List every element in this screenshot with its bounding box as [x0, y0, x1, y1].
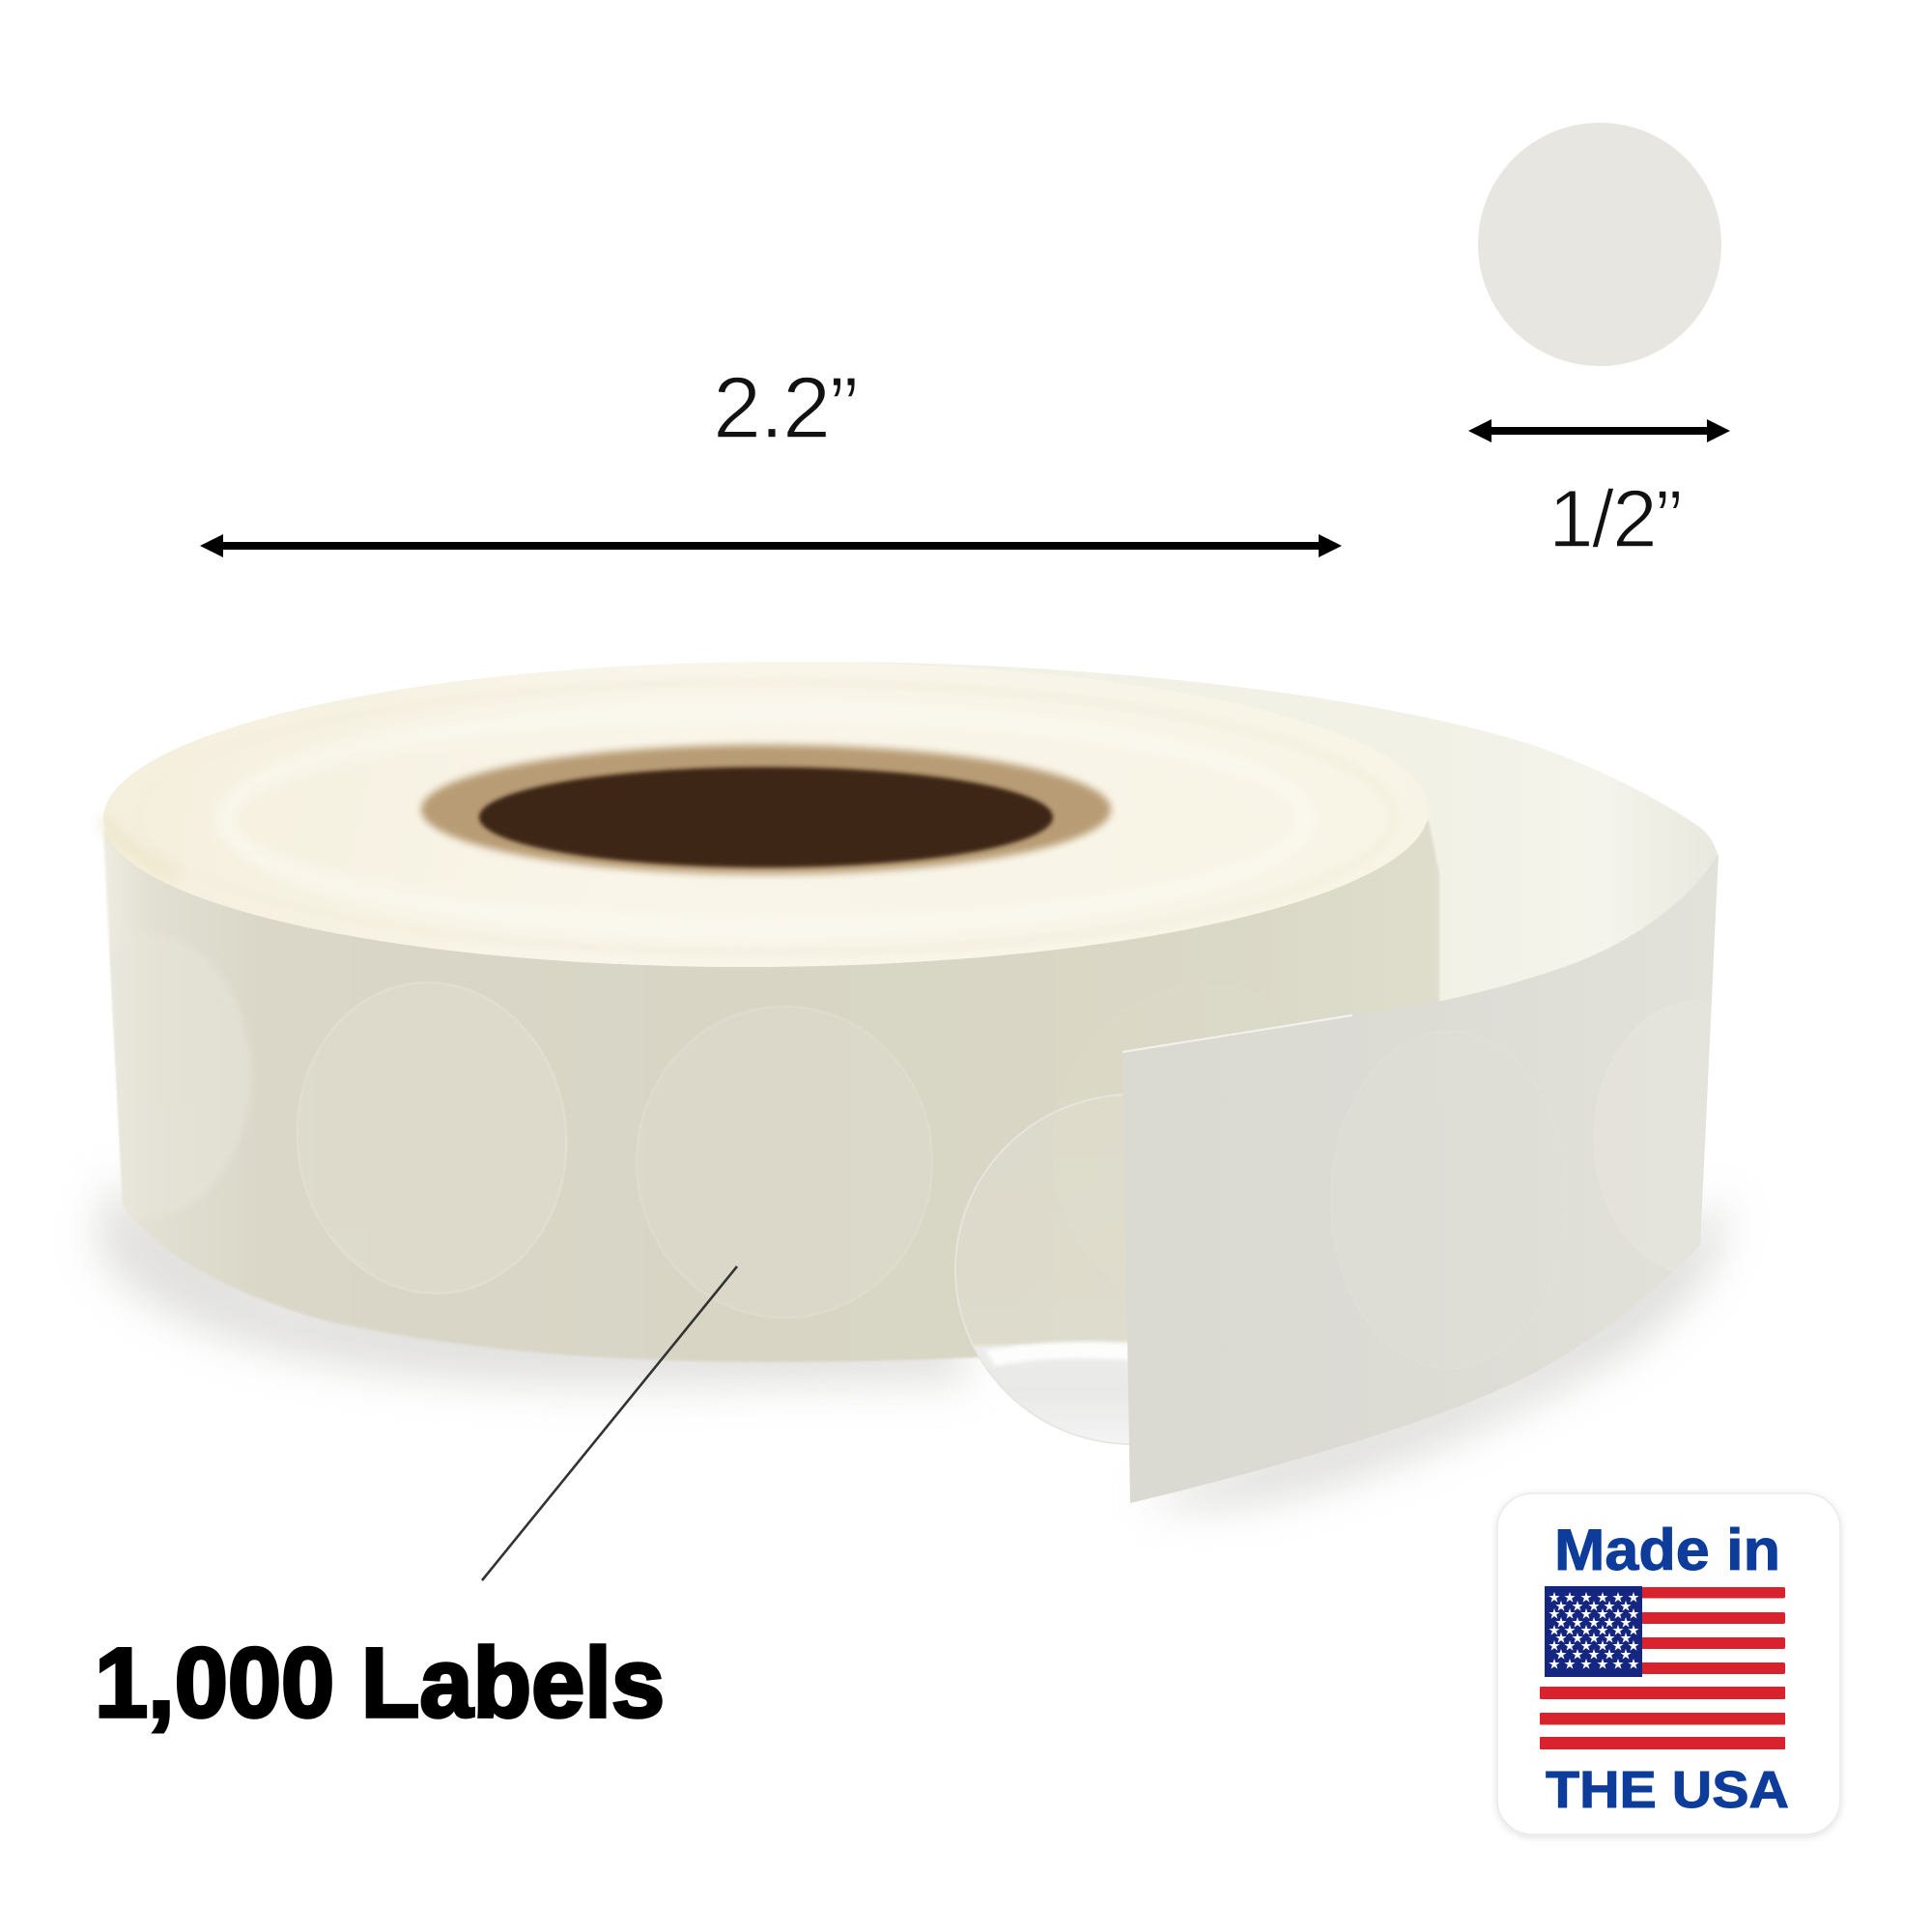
flag stars: ★★★★★ — [1555, 1615, 1633, 1631]
flag stars: ★★★★★ — [1555, 1600, 1633, 1615]
flag stars: ★★★★★★ — [1548, 1623, 1640, 1638]
badge card — [1497, 1493, 1840, 1834]
flag stars: ★★★★★ — [1555, 1648, 1633, 1663]
strip label 2 — [1594, 1001, 1806, 1275]
roll top face — [102, 657, 1430, 972]
label count: 1,000 Labels — [95, 1628, 665, 1738]
dimension: label diameter arrow — [1468, 419, 1730, 442]
back of unrolled strip — [788, 662, 1719, 1063]
unrolled strip front — [1122, 854, 1719, 1503]
roll of labels — [39, 657, 1806, 1505]
peeled clear label — [955, 1094, 1309, 1444]
label 1 — [110, 947, 247, 1169]
dimension: label diameter value: 1/2” — [1548, 473, 1681, 564]
winding lines on top face — [104, 682, 1394, 952]
badge heading: Made in — [1554, 1518, 1780, 1582]
core rim — [421, 745, 1111, 874]
labels on roll side — [39, 933, 1362, 1318]
labels on strip — [1331, 1001, 1806, 1369]
label 3 — [637, 1007, 932, 1318]
flag canton — [1545, 1586, 1642, 1677]
flag stars: ★★★★★★ — [1548, 1590, 1640, 1605]
core interior — [479, 767, 1053, 867]
flag stars: ★★★★★★ — [1548, 1638, 1640, 1654]
strip label 1 — [1331, 1031, 1567, 1369]
made in the USA badge — [1497, 1493, 1840, 1834]
badge footer: THE USA — [1546, 1761, 1789, 1819]
flag stars: ★★★★★★ — [1548, 1658, 1640, 1673]
flag stars: ★★★★★★ — [1548, 1607, 1640, 1623]
label size swatch — [1478, 123, 1721, 366]
flag stars: ★★★★★ — [1555, 1631, 1633, 1646]
cardboard core — [421, 745, 1111, 874]
dimension: roll width value: 2.2” — [713, 360, 857, 457]
roll and strip soft shadow — [97, 1179, 1724, 1505]
leader line — [482, 1266, 737, 1580]
label 4 — [1053, 985, 1362, 1314]
flag stars — [1548, 1590, 1640, 1673]
label 2 — [296, 981, 568, 1294]
dimension: roll width arrow — [200, 534, 1342, 557]
flag — [1540, 1586, 1785, 1749]
roll side wall — [103, 821, 1439, 1362]
flag stripes — [1540, 1587, 1785, 1749]
